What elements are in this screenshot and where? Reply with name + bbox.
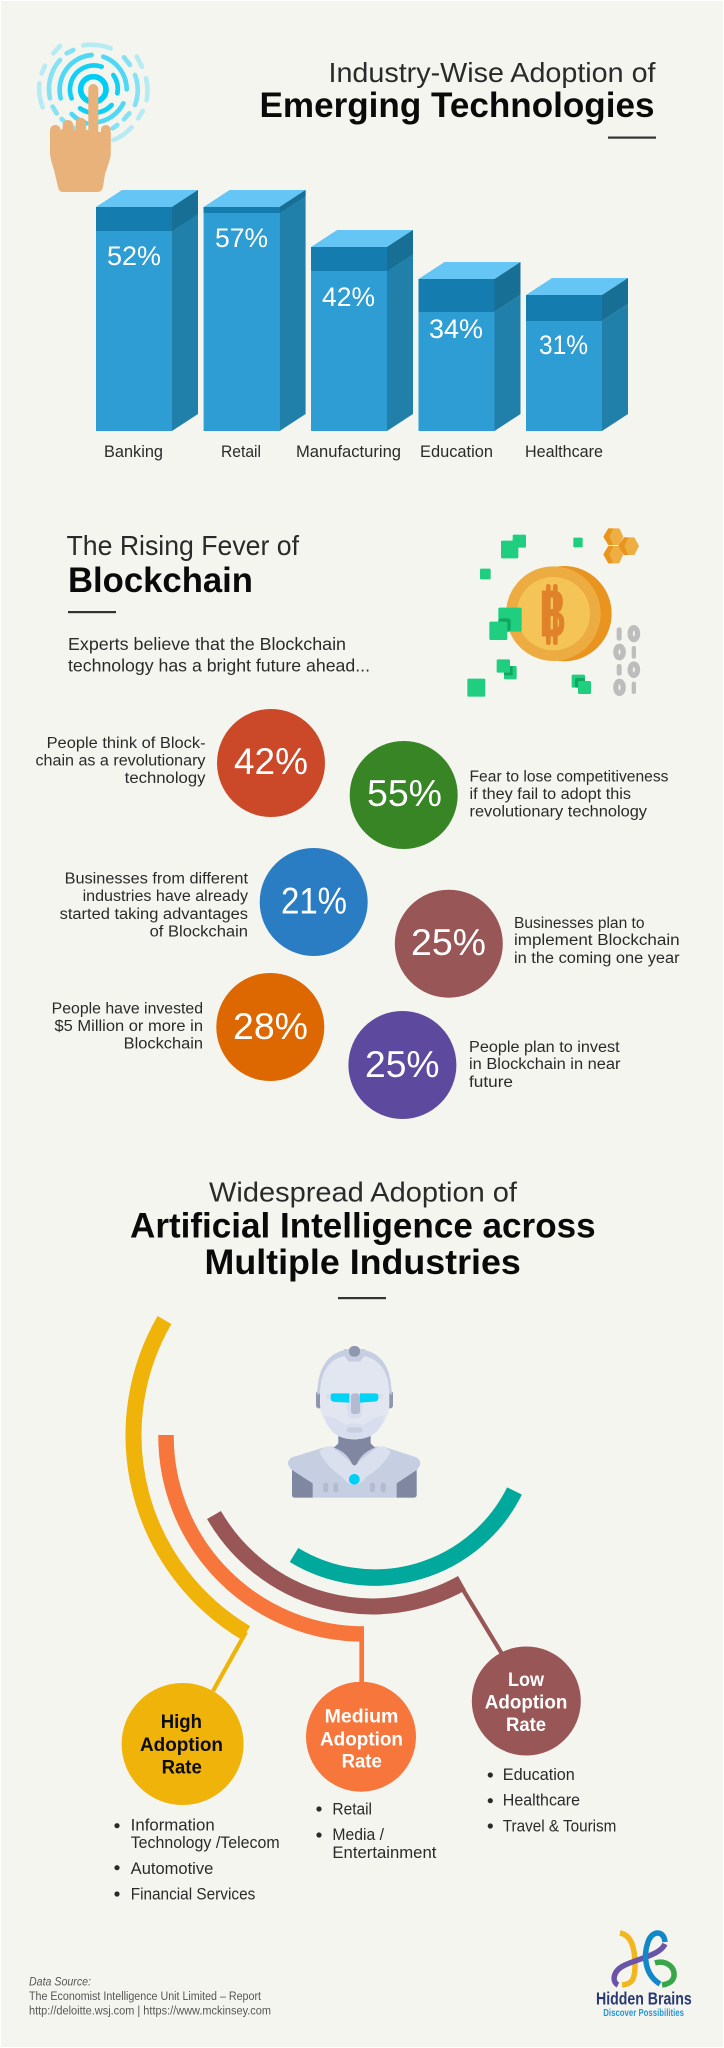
list: medium adoption industries: Entertainment	[332, 1844, 437, 1862]
footer: data source: Data Source:	[29, 1976, 91, 1988]
list: medium adoption industries	[316, 1801, 437, 1862]
group: low adoption rate: Low	[508, 1669, 545, 1691]
arc and connector: medium adoption	[166, 1435, 364, 1685]
bar: banking: 52%	[107, 241, 161, 271]
footer: data source: http://deloitte.wsj.com | https://www.mckinsey.com	[29, 2006, 271, 2018]
group: medium adoption rate: Medium	[325, 1706, 398, 1728]
list: medium adoption industries: Media /	[332, 1826, 384, 1844]
heading: artificial intelligence: Widespread Adoption of	[209, 1177, 517, 1208]
list: medium adoption industries: Retail	[332, 1801, 372, 1819]
list: low adoption industries: Education	[503, 1766, 575, 1784]
heading: emerging technologies: Emerging Technologies	[260, 86, 654, 125]
text: blockchain intro	[68, 634, 370, 675]
heading: emerging technologies	[260, 57, 656, 139]
bar: retail	[204, 190, 306, 461]
heading: artificial intelligence	[130, 1177, 596, 1299]
stat: 42% revolutionary technology	[36, 709, 325, 817]
bar: manufacturing	[296, 230, 413, 461]
logo: hidden brains: Hidden Brains	[596, 1989, 692, 2009]
bar: retail: 57%	[215, 223, 268, 253]
heading: blockchain	[66, 530, 299, 613]
stat: 25% plan to implement: in the coming one year	[514, 950, 680, 967]
group: high adoption rate: Adoption	[140, 1734, 223, 1756]
stat: 28% invested $5 million: $5 Million or more in	[54, 1018, 203, 1035]
heading: artificial intelligence: Artificial Intelligence across	[130, 1207, 596, 1246]
panel: emerging technologies	[39, 45, 656, 461]
stat: 25% plan to invest: People plan to invest	[469, 1039, 620, 1056]
group: low adoption rate	[472, 1646, 616, 1835]
bar: manufacturing: 42%	[322, 282, 375, 312]
bar: retail: Retail	[221, 443, 261, 461]
heading: artificial intelligence: Multiple Industries	[204, 1243, 521, 1282]
group: high adoption rate: Rate	[162, 1756, 202, 1778]
arc: teal decorative band	[294, 1491, 514, 1578]
arc and connector: high adoption	[134, 1320, 246, 1691]
icon: bitcoin coin with blocks and binary	[467, 528, 639, 697]
logo: hidden brains	[596, 1933, 692, 2019]
bar: healthcare	[525, 278, 628, 461]
stat: 42% revolutionary technology: People think of Block-	[47, 735, 206, 752]
bar: manufacturing: Manufacturing	[296, 443, 401, 461]
bar: banking: Banking	[104, 443, 163, 461]
stat: 25% plan to invest: in Blockchain in near	[469, 1056, 620, 1073]
stat: 25% plan to implement: implement Blockchain	[514, 932, 680, 949]
footer: data source	[29, 1976, 271, 2018]
panel: blockchain	[36, 528, 680, 1119]
bar: education	[418, 262, 520, 461]
bar: healthcare: Healthcare	[525, 443, 603, 461]
list: low adoption industries: Healthcare	[503, 1792, 580, 1810]
group: medium adoption rate: Adoption	[320, 1728, 403, 1750]
stat: 28% invested $5 million: Blockchain	[124, 1036, 203, 1053]
stat: 21% businesses already using blockchain: 21%	[281, 880, 347, 922]
stat: 25% plan to invest: 25%	[365, 1044, 440, 1085]
bar: banking	[96, 190, 198, 461]
bar: healthcare: 31%	[539, 330, 588, 360]
logo: hidden brains: Discover Possibilities	[603, 2007, 684, 2019]
list: high adoption industries: Information	[131, 1817, 215, 1835]
stat: 55% fear to lose competitiveness	[350, 741, 669, 849]
stat: 25% plan to invest: future	[469, 1074, 513, 1091]
icon: robot bust	[288, 1346, 420, 1498]
stat: 25% plan to implement: Businesses plan to	[514, 915, 644, 932]
stat: 55% fear to lose competitiveness: 55%	[367, 773, 442, 814]
stat: 21% businesses already using blockchain: Businesses from different	[65, 871, 249, 888]
stat: 25% plan to implement	[395, 890, 680, 998]
list: high adoption industries: Technology /Telecom	[131, 1834, 280, 1852]
list: high adoption industries: Automotive	[131, 1860, 213, 1878]
stat: 28% invested $5 million: 28%	[233, 1006, 308, 1047]
stat: 42% revolutionary technology: chain as a revolutionary	[36, 752, 206, 769]
bar: education: 34%	[429, 314, 483, 344]
stat: 21% businesses already using blockchain: of Blockchain	[150, 924, 248, 941]
text: blockchain intro: technology has a bright future ahead...	[68, 655, 370, 675]
list: high adoption industries: Financial Services	[131, 1886, 255, 1904]
group: medium adoption rate	[306, 1682, 437, 1862]
heading: blockchain: The Rising Fever of	[66, 530, 299, 561]
group: low adoption rate: Rate	[506, 1714, 546, 1736]
bar: education: Education	[420, 443, 493, 461]
group: low adoption rate: Adoption	[485, 1691, 567, 1713]
text: blockchain intro: Experts believe that the Blockchain	[68, 634, 346, 654]
stat: 25% plan to invest	[348, 1011, 620, 1119]
icon: hand touching fingerprint rings	[39, 45, 147, 192]
heading: emerging technologies: Industry-Wise Adoption of	[328, 57, 656, 88]
stat: 42% revolutionary technology: technology	[125, 770, 206, 787]
stat: 55% fear to lose competitiveness: Fear to lose competitiveness	[470, 769, 669, 786]
stat: 55% fear to lose competitiveness: revolutionary technology	[470, 804, 647, 821]
panel: artificial intelligence	[114, 1177, 616, 1904]
icon: bitcoin coin with blocks and binary: B	[539, 578, 566, 652]
heading: blockchain: Blockchain	[68, 561, 253, 600]
stat: 21% businesses already using blockchain: started taking advantages	[60, 906, 248, 923]
stat: 21% businesses already using blockchain	[60, 848, 368, 956]
group: high adoption rate	[114, 1683, 280, 1904]
group: medium adoption rate: Rate	[342, 1751, 382, 1773]
stat: 28% invested $5 million	[52, 973, 324, 1081]
list: low adoption industries: Travel & Tourism	[503, 1817, 616, 1835]
stat: 55% fear to lose competitiveness: if they fail to adopt this	[470, 786, 631, 803]
stat: 28% invested $5 million: People have invested	[52, 1000, 203, 1018]
group: high adoption rate: High	[161, 1711, 202, 1733]
list: high adoption industries	[114, 1817, 280, 1904]
stat: 25% plan to implement: 25%	[411, 922, 486, 963]
list: low adoption industries	[488, 1766, 616, 1835]
footer: data source: The Economist Intelligence Unit Limited – Report	[29, 1991, 262, 2003]
chart: 3D bar chart of adoption by industry	[96, 190, 628, 461]
arc and connector: low adoption	[214, 1515, 502, 1654]
stat: 21% businesses already using blockchain: industries have already	[83, 888, 248, 905]
stat: 42% revolutionary technology: 42%	[234, 741, 308, 782]
